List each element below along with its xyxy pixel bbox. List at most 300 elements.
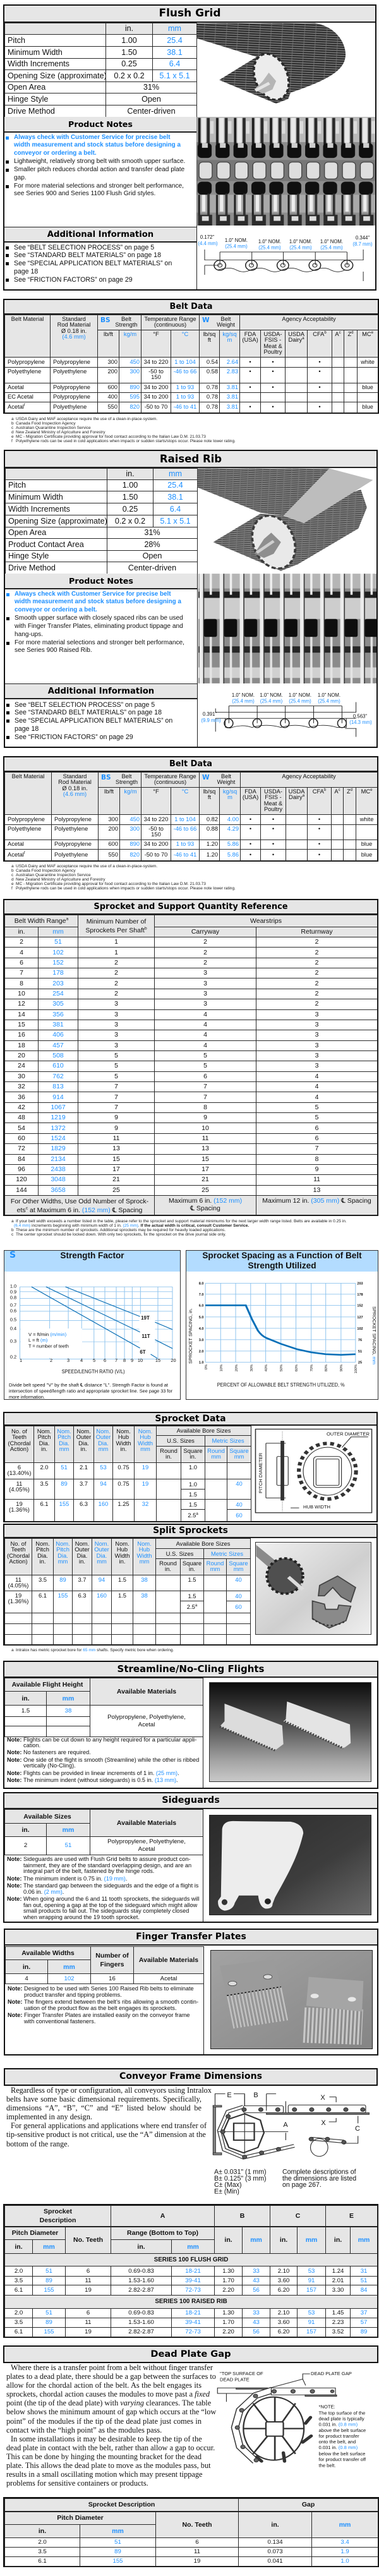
- table: sprocket and support quantities: 1219: [51, 1114, 66, 1121]
- table: sprocket and support quantities: 5: [315, 1114, 318, 1121]
- table: belt data flush grid: -46 to 66: [174, 368, 196, 375]
- table: sprocket and support quantities: 54: [18, 1124, 25, 1132]
- table: sprocket and support quantities: 2438: [51, 1165, 66, 1173]
- table: sprocket and support quantities: 12: [18, 1000, 25, 1008]
- title: dead plate gap: Dead Plate Gap: [150, 2349, 231, 2359]
- table: frame dimensions: 11: [85, 2319, 91, 2326]
- table: sprocket and support quantities: 13: [112, 1145, 120, 1152]
- table: frame dimensions: 2.82-2.87: [128, 2287, 154, 2293]
- table: dead plate gap: 19: [194, 2558, 200, 2565]
- table: belt data flush grid: 2.83: [227, 368, 238, 375]
- table: belt data raised rib: •: [318, 816, 320, 822]
- table: sprocket data: mm: [99, 1445, 108, 1452]
- diagram: raised rib side dimensions: 1.0" NOM.: [289, 692, 311, 698]
- table: sprocket and support quantities: 356: [52, 1011, 64, 1018]
- table: sprocket and support quantities: in.: [18, 928, 25, 936]
- spec table: raised rib: Pitch: [8, 481, 26, 490]
- table: sprocket data: 19: [142, 1464, 148, 1471]
- chart: strength factor lines: [9, 1284, 176, 1399]
- table: finger plate sizes and materials: Acetal: [160, 1975, 177, 1982]
- table: sprocket data: 0.75: [117, 1480, 129, 1487]
- table: belt data flush grid: 600: [107, 384, 117, 390]
- panel: belt data flush grid: [4, 300, 378, 412]
- chart: sprocket spacing curve: 2.0: [199, 1350, 203, 1354]
- table: belt data flush grid: Temperature Range: [144, 316, 196, 322]
- table: belt data flush grid: 34 to 200: [144, 394, 168, 400]
- table: finger plate sizes and materials: Number of: [95, 1952, 129, 1959]
- sideguard notes: Note:: [7, 1882, 21, 1889]
- table: frame dimensions: 1.53-1.60: [128, 2277, 154, 2284]
- table: sprocket data: 60: [236, 1512, 243, 1519]
- table: sprocket data: 1.25: [117, 1500, 129, 1507]
- table: belt data flush grid: lb/sq: [203, 331, 215, 337]
- table: sideguard sizes and materials: in.: [21, 1826, 30, 1834]
- footnotes: belt data raised rib: Canada Food Inspection Agency: [16, 869, 76, 873]
- text: conveyor frame introduction: belts have some basic dimensional requirements. Specifically,: [6, 2095, 202, 2104]
- table: sprocket data: Square: [183, 1447, 203, 1454]
- chart: sprocket spacing curve: 10%: [220, 1364, 224, 1371]
- table: flight sizes and materials: 1.5: [21, 1707, 30, 1714]
- table: belt data flush grid: Weight: [217, 322, 235, 328]
- chart: strength factor lines: 0.6: [10, 1308, 16, 1314]
- spec table: raised rib: 1.00: [123, 481, 138, 490]
- chart: sprocket spacing curve: 50%: [280, 1364, 284, 1371]
- table: dead plate gap: in.: [39, 2527, 46, 2535]
- table: sprocket and support quantities: 84: [18, 1155, 25, 1163]
- diagram: conveyor frame dimensions: B± 0.125" (3 mm): [214, 2175, 267, 2182]
- table: sprocket and support quantities: 4: [20, 949, 23, 956]
- spec table: flush grid: Open: [141, 95, 161, 104]
- chart: strength factor lines: V = ft/min (m/min): [28, 1332, 67, 1337]
- table: frame dimensions: 51: [45, 2268, 52, 2274]
- table: belt data raised rib: 34 to 220: [144, 816, 168, 822]
- table: dead plate gap: 3.5: [38, 2548, 47, 2555]
- table: split sprockets: Outer: [94, 1546, 109, 1553]
- footnotes: belt data flush grid: c: [11, 426, 13, 430]
- table: frame dimensions: 2.20: [222, 2287, 234, 2293]
- table: frame dimensions: 157: [306, 2328, 316, 2335]
- table: split sprockets: in.: [119, 1558, 125, 1565]
- table: finger plate sizes and materials: in.: [23, 1963, 30, 1971]
- table: frame dimensions: 1.70: [222, 2277, 234, 2284]
- chart: strength factor lines: 0.5: [10, 1316, 16, 1323]
- table: sprocket and support quantities: etsc at Maximum 6 in. (152 mm) ℄ Spacing: [17, 1206, 142, 1214]
- table: belt data flush grid: FDA: [244, 331, 256, 337]
- table: split sprockets: Pitch: [56, 1546, 69, 1553]
- additional information list: See “STANDARD BELT MATERIALS” on page 18: [15, 709, 162, 716]
- spec table: raised rib: 31%: [144, 528, 160, 537]
- table: belt data raised rib: white: [360, 816, 373, 822]
- table: sprocket data: Nom.: [96, 1428, 111, 1435]
- chart: strength factor lines: intersection of speed/length ratio and appropriate sprocket line. See page 33 for: [9, 1388, 172, 1393]
- spec table: flush grid: in.: [125, 24, 133, 33]
- table: sprocket and support quantities: 3: [315, 1062, 318, 1069]
- table: sprocket and support quantities: 36: [18, 1093, 25, 1101]
- title: dead plate gap: [4, 2347, 377, 2362]
- table: sprocket data: (1.36%): [9, 1506, 30, 1513]
- table: frame dimensions: Sprocket: [44, 2208, 72, 2215]
- table: split sprockets: mm: [210, 1565, 220, 1572]
- table: sideguard sizes and materials: 51: [65, 1842, 71, 1849]
- table: belt data flush grid: 1 to 93: [176, 394, 194, 400]
- icon: blue S symbol: S: [9, 1250, 16, 1260]
- spec table: raised rib: Minimum Width: [8, 493, 63, 502]
- table: belt data raised rib: Weight: [217, 779, 235, 785]
- table: sprocket and support quantities: 2: [315, 969, 318, 977]
- table: frame dimensions: 0.69-0.83: [128, 2268, 154, 2274]
- diagram: raised rib side dimensions: (9.9 mm): [201, 718, 221, 723]
- table: belt data raised rib: Poultry: [264, 806, 282, 812]
- panel: flush grid: [4, 6, 375, 289]
- table: sprocket data: 89: [61, 1480, 68, 1487]
- table: belt data flush grid: 550: [107, 404, 117, 410]
- table: sprocket and support quantities: 102: [52, 949, 64, 956]
- diagram: conveyor frame dimensions: Complete descriptions of: [282, 2168, 356, 2176]
- table: belt data raised rib: m: [227, 794, 232, 800]
- title: streamline no-cling flights: [4, 1662, 377, 1678]
- sideguard notes: tainment, they are of the standard overlapping design, and are an: [23, 1862, 191, 1869]
- product notes list: width measurement and stock status before designing a: [14, 141, 181, 148]
- table: split sprockets: 19: [15, 1592, 21, 1599]
- diagram: conveyor frame dimensions: C: [355, 2125, 360, 2133]
- table: belt data flush grid: Dairya: [288, 337, 304, 343]
- table: split sprockets: Available Bore Sizes: [176, 1540, 230, 1547]
- table: frame dimensions: mm: [358, 2236, 370, 2244]
- table: belt data flush grid: 34 to 200: [144, 384, 168, 390]
- table: sprocket and support quantities: 9: [114, 1114, 118, 1121]
- table: sideguard sizes and materials: Polypropylene, Polyethylene,: [107, 1838, 186, 1845]
- title: finger transfer plates: Finger Transfer Plates: [136, 1932, 246, 1942]
- table: split sprockets: 3.5: [39, 1576, 47, 1583]
- flight notes: Note:: [7, 1757, 21, 1763]
- table: belt data flush grid: USDA-: [264, 331, 282, 337]
- product notes list: Always check with Customer Service for precise belt: [14, 134, 171, 140]
- chart: strength factor lines: L = ft (m): [28, 1337, 48, 1343]
- table: split sprockets: in.: [165, 1565, 171, 1572]
- heading: strength factor: [4, 1251, 180, 1272]
- table: sprocket and support quantities: 25: [202, 1186, 209, 1194]
- panel: sideguards: [4, 1793, 377, 1922]
- footnotes: belt data flush grid: f: [11, 439, 13, 443]
- table: frame dimensions: 51: [45, 2309, 52, 2316]
- footnotes: sprocket and support quantities: a: [11, 1219, 14, 1223]
- additional information list: See “SPECIAL APPLICATION BELT MATERIALS” on: [15, 717, 172, 725]
- table: sprocket data: Outer: [96, 1433, 111, 1440]
- title: conveyor frame dimensions: [5, 2069, 376, 2085]
- table: sprocket data: in.: [41, 1445, 47, 1452]
- table: sprocket data: in.: [190, 1453, 196, 1460]
- panel: dead plate gap heading: [4, 2347, 377, 2362]
- product notes list: Smooth upper surface with closely spaced ribs can be used: [15, 615, 183, 622]
- heading: product notes: Product Notes: [68, 119, 133, 129]
- diagram: raised rib side dimensions: 1.0" NOM.: [232, 692, 255, 698]
- table: belt data raised rib: MCe: [361, 788, 372, 795]
- table: frame dimensions: 37: [361, 2309, 367, 2316]
- table: split sprockets: 11: [15, 1576, 21, 1583]
- spec table: raised rib: Hinge Style: [8, 551, 49, 560]
- sideguard notes: Note:: [7, 1856, 21, 1862]
- table: belt data raised rib: 34 to 200: [144, 841, 168, 847]
- table: sprocket and support quantities: 610: [52, 1062, 64, 1069]
- table: sprocket and support quantities: 3: [203, 1000, 207, 1008]
- text: dead plate gap explanation: contact with the “high point” as the modules pass.: [6, 2426, 162, 2435]
- table: sprocket data: 1.5: [189, 1501, 197, 1508]
- table: belt data raised rib: kg/m: [124, 788, 137, 795]
- table: frame dimensions: 18-21: [185, 2268, 201, 2274]
- chart: strength factor lines: 0.7: [10, 1303, 16, 1308]
- footnotes: belt data flush grid: MC - Migration Certificate providing approval for food contact according to the Italian Law D.M. 21.03.73: [16, 435, 206, 439]
- diagram: dead plate gap: *NOTE:: [318, 2404, 335, 2409]
- diagram: dead plate gap: DEAD PLATE GAP: [311, 2371, 352, 2376]
- table: belt data flush grid: •: [318, 384, 321, 390]
- table: sprocket and support quantities: 2: [315, 938, 318, 946]
- table: split sprockets: Nom.: [35, 1540, 50, 1547]
- title: sideguards: [4, 1793, 377, 1809]
- image: raised rib close-up photo: [198, 574, 376, 683]
- product notes list: Always check with Customer Service for precise belt: [15, 590, 171, 598]
- diagram: conveyor frame dimensions: [212, 2091, 370, 2196]
- table: sprocket data: mm: [211, 1453, 221, 1460]
- table: sprocket and support quantities: 3: [114, 1031, 118, 1038]
- table: split sprockets: (Chordal: [7, 1552, 30, 1559]
- table: sprocket and support quantities: 144: [16, 1186, 27, 1194]
- table: split sprockets: Metric Sizes: [211, 1550, 243, 1557]
- table: frame dimensions: E: [349, 2212, 354, 2220]
- spec table: flush grid: Width Increments: [8, 59, 69, 68]
- text: dead plate gap explanation: allow for the chordal action of the belt. As the belt engages its: [6, 2381, 202, 2390]
- table: frame dimensions: in.: [224, 2236, 232, 2244]
- table: sprocket data: Nom.: [57, 1428, 71, 1435]
- table: belt data flush grid: 0.54: [207, 359, 218, 365]
- title: split sprockets: Split Sprockets: [153, 1526, 228, 1536]
- table: belt data raised rib: 1 to 104: [174, 816, 196, 822]
- table: split sprockets: in.: [40, 1558, 45, 1565]
- table: sprocket data: 1.5: [189, 1491, 197, 1498]
- table: sprocket and support quantities: Belt Width Rangea: [15, 917, 68, 925]
- product notes list: hang-ups.: [15, 631, 43, 638]
- table: belt data raised rib: 4.00: [227, 816, 239, 822]
- table: sprocket data: 19: [142, 1480, 148, 1487]
- chart: strength factor lines: 9: [131, 1357, 133, 1363]
- table: sprocket data: (13.40%): [7, 1469, 32, 1476]
- table: sprocket and support quantities: 9: [315, 1165, 318, 1173]
- table: frame dimensions: 39-41: [185, 2277, 201, 2284]
- table: dead plate gap: 0.041: [268, 2558, 283, 2565]
- table: split sprockets: 1.5: [118, 1592, 126, 1599]
- text: dead plate gap explanation: Where there is a transfer point from a belt without finger transfer: [11, 2363, 213, 2372]
- table: frame dimensions: in.: [280, 2236, 287, 2244]
- table: sprocket and support quantities: 5: [114, 1052, 118, 1059]
- table: split sprockets: Dia.: [37, 1552, 48, 1559]
- text: conveyor frame introduction: For general applications and applications where end transfer of: [11, 2121, 207, 2130]
- table: frame dimensions: 2.0: [15, 2268, 23, 2274]
- table: belt data raised rib: Agency Acceptability: [282, 773, 336, 779]
- footnotes: belt data raised rib: New Zealand Ministry of Agriculture and Forestry: [16, 877, 105, 882]
- table: split sprockets: Dia.: [57, 1552, 68, 1559]
- table: split sprockets: mm: [140, 1558, 149, 1565]
- table: belt data flush grid: Polypropylene: [53, 384, 90, 390]
- table: split sprockets: in.: [79, 1558, 85, 1565]
- table: sprocket data: 40: [236, 1501, 243, 1508]
- chart: sprocket spacing curve: 100%: [354, 1364, 358, 1373]
- table: split sprockets: Width: [115, 1552, 129, 1559]
- table: belt data flush grid: MCe: [362, 331, 373, 337]
- table: sprocket data: (4.05%): [9, 1486, 30, 1493]
- table: belt data raised rib: (USA): [243, 794, 258, 800]
- chart: sprocket spacing curve: 127: [357, 1316, 363, 1320]
- product notes list: conveyor or ordering a belt.: [15, 606, 97, 613]
- table: sprocket and support quantities: 32: [18, 1083, 25, 1090]
- diagram: dead plate gap: onto the belt, and: [318, 2439, 356, 2445]
- additional information list: See “FRICTION FACTORS” on page 29: [14, 276, 133, 284]
- table: sprocket data: Nom.: [138, 1428, 152, 1435]
- table: sprocket data: 94: [100, 1480, 107, 1487]
- panel: frame dimensions table: [4, 2205, 377, 2337]
- table: sprocket and support quantities: 2: [315, 990, 318, 997]
- text: conveyor frame introduction: dimensions “A”, “B”, “C” and “E” listed below should be: [6, 2104, 202, 2112]
- table: frame dimensions: Range (Bottom to Top): [127, 2229, 198, 2237]
- table: belt data raised rib: blue: [361, 841, 372, 847]
- title: sprocket data: [4, 1413, 376, 1426]
- table: frame dimensions: in.: [334, 2236, 342, 2244]
- table: sprocket and support quantities: 3: [203, 969, 207, 977]
- flight notes: Note:: [7, 1749, 21, 1755]
- table: sprocket and support quantities: 5: [315, 1104, 318, 1111]
- diagram: raised rib side dimensions: 1.0" NOM.: [318, 692, 340, 698]
- table: split sprockets: 1.5: [188, 1592, 196, 1599]
- sideguard notes: fan out, opening a gap at the top of the sideguard which might allow: [23, 1902, 197, 1908]
- table: split sprockets: (4.05%): [8, 1582, 28, 1589]
- table: belt data raised rib: •: [250, 816, 251, 822]
- table: sprocket data: 2.0: [40, 1464, 49, 1471]
- table: sprocket and support quantities: 2: [20, 938, 23, 946]
- table: frame dimensions: 2.10: [278, 2309, 289, 2316]
- table: sprocket data: Action): [10, 1445, 28, 1452]
- table: split sprockets: Nom.: [137, 1540, 152, 1547]
- footnotes: belt data raised rib: d: [11, 877, 14, 882]
- spec table: raised rib: 0.25: [123, 504, 138, 513]
- text: dead plate gap explanation: In some installations it may be desirable to keep the tip of the: [11, 2435, 202, 2443]
- table: frame dimensions: mm: [43, 2242, 55, 2250]
- table: belt data flush grid: 400: [107, 394, 117, 400]
- table: split sprockets: No. of: [10, 1540, 27, 1547]
- chart: strength factor lines: 0.3: [10, 1338, 16, 1344]
- table: sprocket and support quantities: 16: [18, 1031, 25, 1038]
- table: frame dimensions: 3.30: [332, 2287, 344, 2293]
- table: sprocket and support quantities: 7: [114, 1083, 118, 1090]
- diagram: conveyor frame dimensions: X: [321, 2119, 326, 2127]
- table: belt data flush grid: (4.6 mm): [62, 334, 86, 340]
- panel: raised rib: [5, 451, 376, 747]
- table: belt data flush grid: [4, 315, 378, 413]
- text: dead plate gap explanation: plate. This allows the dead plate to move as the modules pass, but: [6, 2461, 211, 2470]
- spec table: flush grid: Open Area: [8, 83, 45, 92]
- table: frame dimensions: 2.01: [332, 2277, 344, 2284]
- table: dead plate gap: 1.9: [340, 2548, 349, 2555]
- heading: sprocket spacing: Sprocket Spacing as a Function of Belt: [202, 1251, 362, 1260]
- diagram: flush grid side dimensions: 1.0" NOM.: [289, 239, 312, 244]
- flight notes: The minimum indent (without sideguards) is 0.5 in. (13 mm).: [23, 1777, 178, 1783]
- table: frame dimensions: 3.52: [332, 2328, 344, 2335]
- table: split sprockets: Teeth: [11, 1546, 25, 1553]
- table: frame dimensions: 6.20: [278, 2328, 289, 2335]
- table: sprocket data: Hub: [118, 1433, 129, 1440]
- diagram: flush grid side dimensions: 1.0" NOM.: [258, 239, 281, 244]
- image: flush grid belt on sprocket: [196, 23, 346, 104]
- table: belt data raised rib: 150: [151, 831, 161, 838]
- table: belt data flush grid: 300: [129, 368, 140, 375]
- table: belt data flush grid: (USA): [242, 337, 258, 343]
- additional information list: See “BELT SELECTION PROCESS” on page 5: [14, 244, 154, 251]
- table: belt data flush grid: lb/ft: [104, 331, 113, 337]
- diagram: conveyor frame dimensions: C± (Max): [214, 2181, 241, 2189]
- table: belt data raised rib: -46 to 41: [174, 852, 196, 858]
- table: sprocket and support quantities: 152: [52, 959, 64, 966]
- chart: sprocket spacing curve: 3.0: [199, 1339, 203, 1342]
- title: conveyor frame dimensions: Conveyor Frame Dimensions: [119, 2071, 262, 2081]
- diagram: dead plate gap: 0.031 in. (0.8 mm): [318, 2445, 358, 2450]
- footnotes: belt data raised rib: Australian Quarantine Inspection Service: [16, 873, 91, 877]
- flight notes: Flights can be provided in linear increments of 1 in. (25 mm).: [23, 1770, 179, 1776]
- table: frame dimensions: SERIES 100 FLUSH GRID: [154, 2256, 228, 2263]
- table: dead plate gap: Pitch Diameter: [57, 2514, 104, 2522]
- table: belt data raised rib: Rod Material: [58, 779, 92, 785]
- title: belt data: Belt Data: [170, 302, 212, 311]
- table: sprocket and support quantities: 813: [52, 1083, 64, 1090]
- table: sprocket and support quantities: Sprockets Per Shaftb: [85, 926, 147, 934]
- table: sprocket data: 6.3: [80, 1500, 88, 1507]
- product notes list: width measurement and stock status before designing a: [15, 598, 181, 605]
- spec table: raised rib: mm: [169, 469, 182, 478]
- chart: strength factor lines: 10: [138, 1357, 143, 1363]
- spec table: flush grid: 38.1: [167, 48, 183, 57]
- table: belt data raised rib: (4.6 mm): [63, 791, 87, 797]
- table: belt data flush grid: 200: [107, 368, 117, 375]
- image: finger transfer plates photo: [210, 1950, 373, 2049]
- table: belt data raised rib: Strength: [116, 779, 138, 785]
- table: sideguard sizes and materials: Available Materials: [117, 1819, 176, 1827]
- chart: strength factor lines: 19T: [141, 1315, 150, 1321]
- table: sprocket and support quantities: 254: [52, 990, 64, 997]
- table: dead plate gap: 3.4: [340, 2539, 349, 2546]
- table: belt data raised rib: Temperature Range: [144, 773, 196, 779]
- table: belt data flush grid: •: [318, 359, 321, 365]
- diagram: conveyor frame dimensions: E± (Min): [214, 2188, 239, 2196]
- table: split sprockets: 155: [58, 1592, 68, 1599]
- table: belt data flush grid: Polypropylene: [53, 359, 90, 365]
- table: sprocket data: 1.0: [189, 1481, 197, 1488]
- diagram: flush grid side dimensions: [198, 234, 373, 281]
- chart: strength factor lines: 6: [104, 1357, 106, 1363]
- table: finger plate sizes and materials: Available Widths: [21, 1949, 75, 1957]
- table: sprocket and support quantities: 203: [52, 980, 64, 987]
- table: belt data raised rib: 550: [108, 852, 118, 858]
- diagram: conveyor frame dimensions: B: [253, 2091, 258, 2099]
- table: sprocket and support quantities: 3: [114, 1011, 118, 1018]
- table: sprocket data: (Chordal: [8, 1440, 30, 1447]
- table: belt data raised rib: FSIS -: [265, 794, 282, 800]
- table: dead plate gap: mm: [339, 2521, 351, 2529]
- table: belt data raised rib: (continuous): [154, 779, 186, 785]
- table: sprocket and support quantities: mm: [52, 928, 64, 936]
- table: belt data raised rib: Dairya: [289, 794, 304, 800]
- table: sprocket data: 11: [16, 1480, 22, 1487]
- footnotes: belt data raised rib: MC - Migration Certificate providing approval for food contact according to the Italian Law D.M. 21.03.73: [16, 882, 206, 886]
- table: frame dimensions: mm: [250, 2236, 262, 2244]
- table: sprocket and support quantities: 5: [114, 1062, 118, 1069]
- panel: sprocket and support quantity reference: [4, 900, 377, 1215]
- table: flight sizes and materials: Available Flight Height: [12, 1681, 83, 1688]
